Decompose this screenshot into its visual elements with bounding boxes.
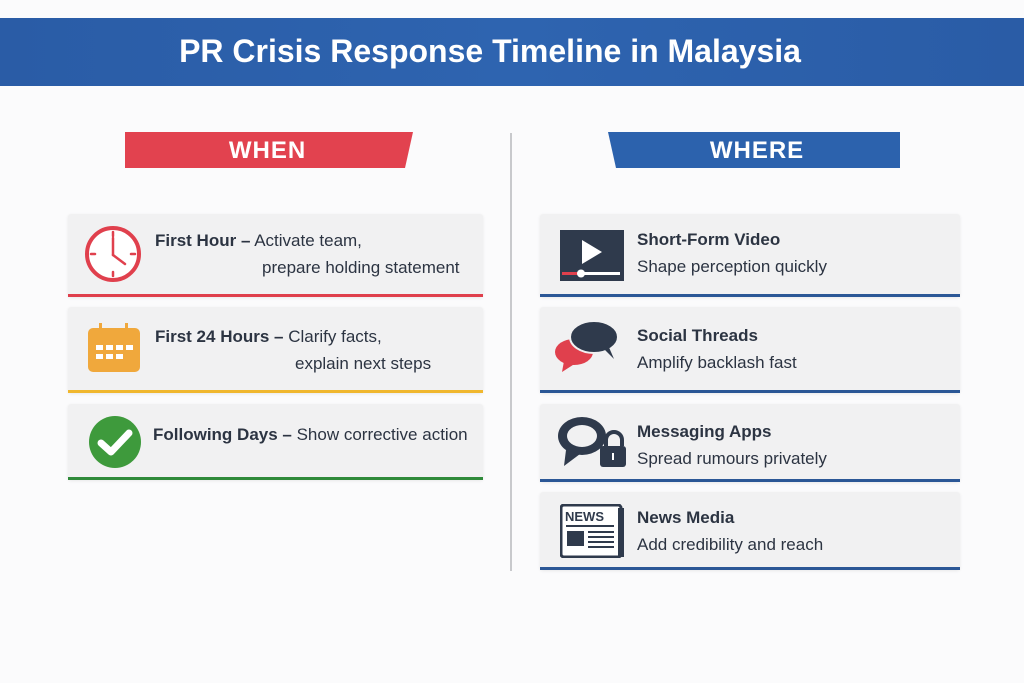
title bar	[0, 18, 1024, 86]
WHERE header: WHERE	[710, 137, 804, 164]
icon: chat lock	[558, 417, 626, 467]
icon: check	[89, 416, 141, 468]
text: Shape perception quickly	[637, 257, 827, 276]
WHEN header	[125, 132, 413, 168]
icon: newspaper: NEWS	[565, 509, 604, 524]
text	[637, 422, 827, 468]
text: First Hour – Activate team,	[155, 231, 362, 250]
text: First 24 Hours – Clarify facts,	[155, 327, 382, 346]
text: explain next steps	[295, 354, 431, 373]
icon: video	[560, 230, 624, 281]
WHERE header	[608, 132, 900, 168]
text: Spread rumours privately	[637, 449, 827, 468]
icon: clock	[85, 226, 141, 282]
card: Social Threads	[540, 307, 960, 393]
icon: newspaper	[560, 504, 624, 558]
icon: calendar	[88, 323, 140, 372]
text	[637, 326, 797, 372]
text: prepare holding statement	[262, 258, 460, 277]
text	[637, 230, 827, 276]
text	[637, 508, 823, 554]
text: Short-Form Video	[637, 230, 780, 249]
card: News Media	[540, 492, 960, 570]
card: Following Days	[68, 404, 483, 480]
text: Social Threads	[637, 326, 758, 345]
text: Amplify backlash fast	[637, 353, 797, 372]
text: Messaging Apps	[637, 422, 771, 441]
card: First 24 Hours	[68, 307, 483, 393]
divider	[510, 133, 512, 571]
text: News Media	[637, 508, 734, 527]
text	[155, 231, 460, 277]
card: First Hour	[68, 214, 483, 297]
card: Messaging Apps	[540, 404, 960, 482]
WHEN header: WHEN	[229, 137, 306, 164]
text	[155, 327, 431, 373]
title: PR Crisis Response Timeline in Malaysia	[179, 33, 801, 69]
text: Following Days – Show corrective action	[153, 425, 468, 444]
text: Add credibility and reach	[637, 535, 823, 554]
icon: chat bubbles	[555, 322, 617, 372]
card: Short-Form Video	[540, 214, 960, 297]
